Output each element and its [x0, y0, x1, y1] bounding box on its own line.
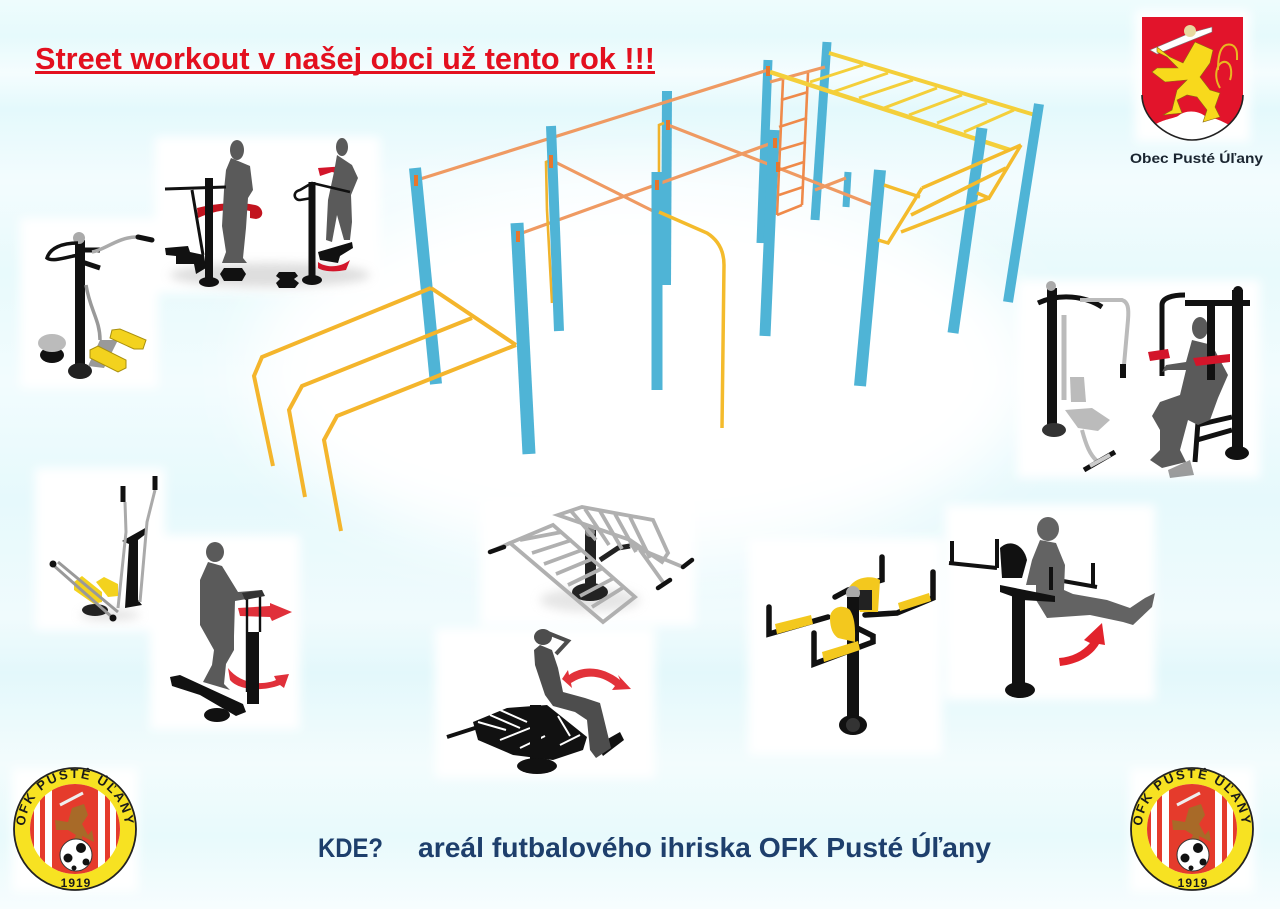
logo: OFK Pusté Úľany left: OFK PUSTÉ ÚĽANY: [16, 768, 134, 825]
logo: OFK Pusté Úľany right: OFK PUSTÉ ÚĽANY: [1133, 768, 1251, 825]
location line: areál futbalového ihriska OFK Pusté Úľany: [418, 832, 991, 863]
logo: OFK Pusté Úľany left: 1919: [61, 876, 91, 890]
inclined ladder: [878, 145, 1021, 243]
curved yellow pull-up bar: [659, 212, 724, 428]
equipment: elliptical with silhouette and red arrows: [170, 542, 292, 722]
equipment: chest press machine: [1038, 281, 1128, 470]
municipality name: Obec Pusté Úľany: [1130, 149, 1263, 166]
equipment: yellow captain's chair: [769, 557, 933, 735]
thin yellow bent bars: [546, 123, 664, 303]
orange bars: [417, 67, 873, 233]
orange brackets: [416, 66, 778, 242]
logo: OFK Pusté Úľany left: [13, 767, 137, 891]
logo: OFK Pusté Úľany right: 1919: [1178, 876, 1208, 890]
location line: KDE?: [318, 833, 383, 863]
title: Street workout v našej obci už tento rok !!!: [35, 41, 655, 76]
parallel dip bars: [254, 288, 516, 531]
orange ladder: [777, 73, 808, 215]
equipment: black sit-up bench with silhouette: [447, 629, 631, 774]
coat of arms: [1142, 17, 1243, 140]
mid and front posts: [415, 104, 1039, 454]
equipment: grey sit-up bench: [490, 507, 692, 622]
equipment: captain's chair with silhouette and red arrow: [949, 517, 1155, 698]
monkey bars: [770, 53, 1035, 150]
back posts: [666, 42, 848, 285]
workout rig structure: [254, 42, 1039, 531]
equipment: leg press with yellow pedals: [38, 232, 152, 379]
equipment: elliptical trainer: [50, 476, 155, 622]
logo: OFK Pusté Úľany right: [1130, 767, 1254, 891]
equipment: twist stepper with man and woman silhouettes: [165, 138, 370, 288]
equipment: chest press with seated silhouette: [1148, 286, 1250, 478]
